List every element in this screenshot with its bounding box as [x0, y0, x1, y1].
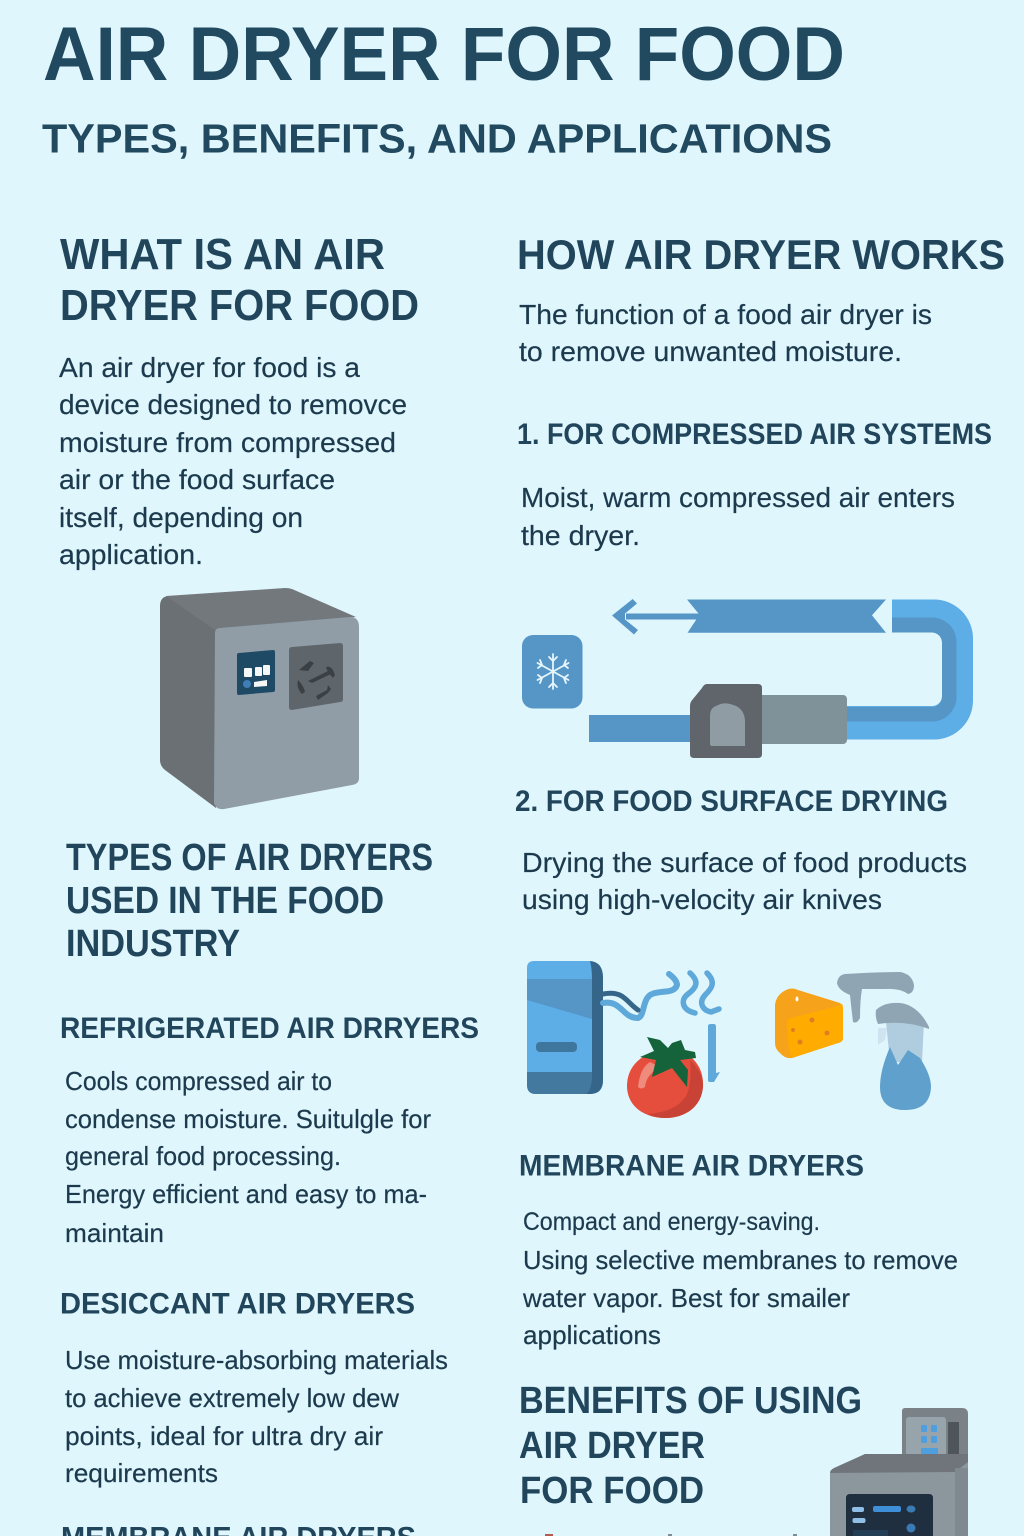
heading: types of air dryers: USED IN THE FOOD	[66, 880, 384, 922]
heading: what is an air dryer: DRYER FOR FOOD	[60, 281, 419, 330]
air stream	[603, 973, 719, 1018]
heading: benefits: AIR DRYER	[519, 1425, 705, 1467]
heading: what is an air dryer: WHAT IS AN AIR	[60, 230, 385, 279]
heading: benefits	[519, 1380, 862, 1512]
text: definition: application.	[59, 539, 203, 570]
text: refrigerated description: condense moisture. Suitulgle for	[65, 1104, 431, 1134]
pipe: U-shaped return	[840, 600, 973, 740]
heading: types of air dryers	[66, 837, 433, 965]
component: filter housing	[758, 695, 847, 744]
text: membrane description: applications	[523, 1320, 661, 1350]
text: desiccant description	[65, 1345, 448, 1488]
text: definition: device designed to removce	[59, 389, 407, 420]
text: refrigerated description: Cools compressed air to	[65, 1066, 332, 1096]
heading: refrigerated air dryers: REFRIGERATED AIR DRRYERS	[60, 1012, 479, 1045]
text: compressed air: Moist, warm compressed air enters	[521, 482, 955, 513]
water spray	[876, 1003, 931, 1110]
text: definition: An air dryer for food is a	[59, 352, 360, 383]
text: food surface: using high-velocity air knives	[522, 884, 882, 915]
subtitle: TYPES, BENEFITS, AND APPLICATIONS	[42, 116, 832, 162]
text: compressed air: the dryer.	[521, 520, 640, 551]
air knife unit	[527, 961, 603, 1094]
text: function: The function of a food air dryer is	[519, 299, 932, 330]
heading: benefits: BENEFITS OF USING	[519, 1380, 862, 1422]
text: food surface	[522, 847, 967, 915]
text: refrigerated description: general food processing.	[65, 1141, 341, 1171]
text: definition: moisture from compressed	[59, 427, 396, 458]
heading: desiccant air dryers: DESICCANT AIR DRYERS	[60, 1288, 415, 1320]
text: membrane description: Compact and energy-saving.	[523, 1208, 820, 1236]
text: refrigerated description: Energy efficient and easy to ma-	[65, 1179, 427, 1209]
component: dryer block	[690, 684, 762, 758]
clipped benefit text tops	[545, 1534, 797, 1536]
icon: air knife and tomato	[527, 961, 720, 1118]
text: refrigerated description: maintain	[65, 1218, 164, 1248]
cheese	[775, 988, 843, 1058]
text: membrane description: water vapor. Best for smailer	[522, 1283, 850, 1313]
heading: food surface drying: 2. FOR FOOD SURFACE DRYING	[515, 785, 948, 818]
heading: types of air dryers: TYPES OF AIR DRYERS	[66, 837, 433, 879]
pipe: inlet	[589, 715, 693, 742]
text: definition	[59, 352, 407, 570]
text: refrigerated description	[65, 1066, 431, 1248]
heading: benefits: FOR FOOD	[520, 1470, 704, 1512]
text: compressed air	[521, 482, 955, 551]
title: AIR DRYER FOR FOOD	[43, 12, 845, 97]
text: function	[519, 299, 932, 367]
icon: cheese and water nozzle	[775, 972, 931, 1110]
text: desiccant description: requirements	[65, 1458, 218, 1488]
heading: how air dryer works: HOW AIR DRYER WORKS	[517, 231, 1005, 278]
heading: membrane air dryers: MEMBRANE AIR DRYERS	[519, 1150, 864, 1182]
text: function: to remove unwanted moisture.	[519, 336, 902, 367]
heading: types of air dryers: INDUSTRY	[66, 923, 240, 965]
text: desiccant description: points, ideal for ultra dry air	[65, 1421, 383, 1451]
icon: air dryer cabinet	[160, 588, 359, 809]
text: membrane description: Using selective membranes to remove	[523, 1245, 958, 1275]
text: definition: itself, depending on	[59, 502, 303, 533]
icon: compact dryer machine	[830, 1408, 968, 1536]
tomato	[627, 1037, 703, 1118]
icon: snowflake	[522, 635, 582, 708]
text: desiccant description: Use moisture-absorbing materials	[65, 1345, 448, 1375]
arrow: outgoing dry air	[612, 599, 886, 634]
text: definition: air or the food surface	[59, 464, 335, 495]
nozzle bar	[837, 972, 914, 1022]
text: food surface: Drying the surface of food products	[522, 847, 967, 878]
text: membrane description	[522, 1208, 958, 1350]
heading: what is an air dryer	[60, 230, 419, 330]
text: desiccant description: to achieve extremely low dew	[65, 1383, 399, 1413]
diagram: compressed air flow	[522, 599, 973, 758]
